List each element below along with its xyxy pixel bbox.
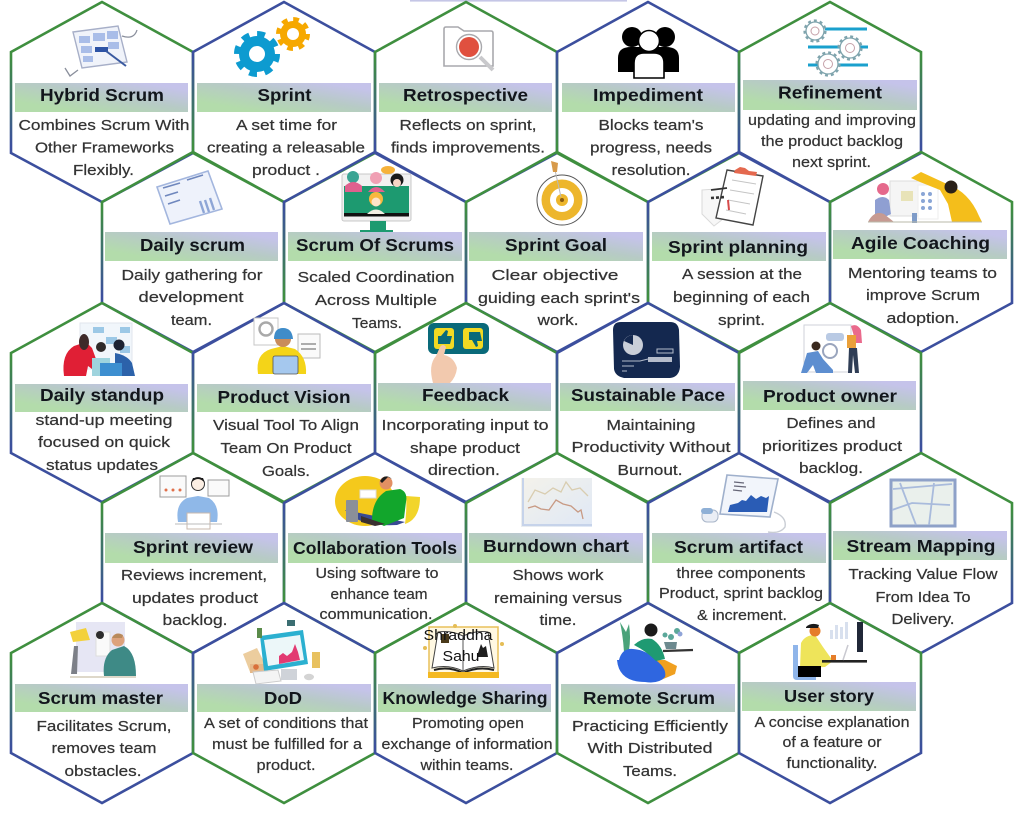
description: of a feature or [782,735,882,751]
heading: Sprint planning [668,237,808,257]
description: Flexibly. [73,163,134,179]
description: Combines Scrum With [18,118,190,134]
description: sprint. [718,313,765,329]
heading band [15,83,188,112]
heading: Refinement [778,83,882,103]
panel: Burndown chart [466,453,648,653]
icon: map frame [891,480,955,526]
description [121,568,267,629]
description: Clear objective [492,268,618,284]
description: Reviews increment, [121,568,267,584]
panel: Feedback [375,303,557,502]
icon: thumbs up and down [428,323,489,383]
icon: video call monitor [342,166,411,233]
description: within teams. [419,758,514,774]
description: & increment. [697,608,787,624]
panel: Scrum Of Scrums [284,152,466,352]
description: the product backlog [761,134,903,150]
description: Visual Tool To Align [213,418,359,434]
description: time. [540,613,576,629]
panel: Product Vision [193,303,375,502]
description: must be fulfilled for a [212,737,363,753]
hexagon [830,152,1012,352]
description: Team On Product [220,441,352,457]
description: Shows work [512,568,604,584]
description: removes team [52,741,156,757]
description [590,118,712,179]
heading band [15,684,188,712]
description: improve Scrum [866,288,980,304]
description: A session at the [682,267,802,283]
description [762,416,902,477]
description: adoption. [886,311,960,327]
description: updates product [132,591,258,607]
hexagon [375,603,557,803]
watermark: author name: Sahu [442,649,480,665]
description: A set of conditions that [204,716,368,732]
heading band [743,381,916,410]
hexagon [11,303,193,502]
description: product. [256,758,316,774]
hexagon [375,2,557,202]
heading band [743,80,917,110]
heading: Retrospective [403,85,528,105]
heading: Impediment [593,85,703,105]
hexagon [11,603,193,803]
hexagon [739,303,921,502]
heading: User story [784,686,874,706]
heading: Sprint Goal [505,235,607,255]
icon: person at computer [793,622,867,680]
hexagon [466,453,648,653]
description: Using software to [316,566,438,582]
hexagon [557,603,739,803]
panel: Remote Scrum [557,603,739,803]
icon: gears [237,20,308,74]
description: remaining versus [494,591,622,607]
description: product . [252,163,320,179]
icon: owner and teammate at board [801,325,862,373]
description [848,266,997,327]
description [18,118,190,179]
panel: Knowledge Sharing [375,603,557,803]
hexagon [193,2,375,202]
description: status updates [46,458,158,474]
description [36,719,172,780]
heading band [378,684,551,712]
hexagon [466,152,648,352]
panel: Daily standup [11,303,193,502]
heading: Stream Mapping [846,536,996,556]
hexagon [648,453,830,653]
heading band [15,384,188,412]
panel: Collaboration Tools [284,453,466,653]
panel: Agile Coaching [830,152,1012,352]
description [572,719,729,780]
icon: analytics tablet [701,475,785,532]
hexagon [102,152,284,352]
description: Promoting open [412,716,524,732]
panel: Product owner [739,303,921,502]
heading: Agile Coaching [851,233,990,253]
heading band [469,232,643,261]
heading band [288,533,462,563]
description: Teams. [623,764,677,780]
description [213,418,359,480]
description: resolution. [612,163,690,179]
icon: scrum master at desk [70,622,136,677]
description: Goals. [262,464,310,480]
description [478,268,640,329]
heading band [833,531,1007,560]
description: communication. [320,607,432,623]
icon: desktop with boxes [243,620,320,684]
description: obstacles. [64,764,142,780]
description: direction. [428,463,500,479]
description: finds improvements. [391,140,545,156]
description: Across Multiple [315,293,437,309]
description: backlog. [162,613,228,629]
description: Teams. [352,316,402,332]
description [382,418,548,479]
description [848,567,998,628]
heading: Product owner [763,386,897,406]
description: Reflects on sprint, [400,118,536,134]
description: exchange of information [382,737,552,753]
description: team. [171,313,212,329]
description: development [138,290,244,306]
heading band [197,83,371,112]
panel: Daily scrum [102,152,284,352]
description: next sprint. [792,155,871,171]
description [316,566,438,623]
description: Burnout. [618,463,682,479]
panel: Retrospective [375,2,557,202]
description: shape product [410,441,520,457]
description: focused on quick [38,435,171,451]
description: three components [676,566,806,582]
heading band [288,232,462,261]
heading band [105,232,278,261]
description: stand-up meeting [36,413,172,429]
icon: open book [423,624,504,678]
description: Other Frameworks [35,140,174,156]
icon: reviewer with charts [160,476,229,529]
hexagon [193,303,375,502]
heading: DoD [264,688,302,708]
heading: Hybrid Scrum [40,85,164,105]
description: Scaled Coordination [298,270,454,286]
icon: tablet board [65,26,137,76]
top strip [410,0,627,2]
description: Defines and [786,416,876,432]
description: Product, sprint backlog [659,586,823,602]
hexagon [557,2,739,202]
description: A set time for [236,118,337,134]
heading band [652,232,826,261]
heading band [378,383,551,411]
description: With Distributed [588,741,712,757]
heading: Daily scrum [140,235,245,255]
description [122,268,263,329]
icon: remote worker [617,622,693,682]
description: Facilitates Scrum, [36,719,172,735]
heading: Knowledge Sharing [382,688,548,708]
description: Blocks team's [598,118,704,134]
description: updating and improving [748,113,916,129]
description: Tracking Value Flow [848,567,998,583]
heading: Sprint review [133,537,253,557]
description [572,418,730,479]
heading: Scrum master [38,688,163,708]
description: Incorporating input to [382,418,548,434]
panel: Scrum master [11,603,193,803]
panel: Sprint Goal [466,152,648,352]
icon: clipboard [702,167,763,226]
description: functionality. [786,756,878,772]
description: Delivery. [892,612,954,628]
icon: person with laptop [254,318,320,374]
hexagon [739,603,921,803]
hexagon [11,2,193,202]
heading: Sprint [258,85,312,105]
icon: dark dashboard [613,322,680,378]
panel: Sustainable Pace [557,303,739,502]
description [382,716,552,774]
description: Productivity Without [572,440,730,456]
description: enhance team [330,587,428,603]
description: work. [536,313,578,329]
heading: Remote Scrum [583,688,715,708]
heading: Scrum Of Scrums [296,235,454,255]
heading: Product Vision [218,387,350,407]
heading band [560,383,735,411]
heading band [652,533,826,563]
heading band [197,684,371,712]
description: creating a releasable [207,140,365,156]
panel: Refinement [739,2,921,202]
icon: team silhouettes [618,27,679,78]
description: beginning of each [673,290,810,306]
panel: Scrum artifact [648,453,830,653]
description: A concise explanation [754,715,910,731]
description: prioritizes product [762,439,902,455]
panel: Hybrid Scrum [11,2,193,202]
description [391,118,545,156]
hexagon [739,2,921,202]
heading: Collaboration Tools [293,538,457,558]
description: From Idea To [876,590,970,606]
description [298,270,454,332]
heading: Daily standup [40,385,164,405]
icon: person working on laptop [335,476,420,526]
description: backlog. [799,461,863,477]
description: Maintaining [606,418,696,434]
heading band [562,83,735,112]
icon: coaching scene [868,172,982,223]
heading band [105,533,278,563]
icon: line chart [521,478,592,527]
hexagon [284,152,466,352]
hexagon [102,453,284,653]
panel: Sprint planning [648,152,830,352]
hexagon [375,303,557,502]
panel: Sprint [193,2,375,202]
heading band [197,384,371,412]
hexagon [648,152,830,352]
hexagon [830,453,1012,653]
watermark: author name: Shraddha [424,628,494,644]
hexagon [193,603,375,803]
watermark: author name [424,628,494,665]
description: progress, needs [590,140,712,156]
description: Mentoring teams to [848,266,997,282]
description [207,118,365,179]
description: Practicing Efficiently [572,719,729,735]
heading band [833,230,1007,259]
heading: Feedback [422,385,509,405]
description [748,113,916,171]
heading band [561,684,735,712]
hexagon [284,453,466,653]
heading band [742,682,916,711]
hexagon [557,303,739,502]
icon: folder with magnifier [444,27,493,70]
heading: Scrum artifact [674,537,803,557]
heading band [469,533,643,563]
heading: Burndown chart [483,536,629,556]
description: Daily gathering for [122,268,263,284]
icon: team at board [63,323,135,376]
panel: Sprint review [102,453,284,653]
description [204,716,368,774]
description [494,568,622,629]
panel: Stream Mapping [830,453,1012,653]
description [754,715,910,772]
description [673,267,810,329]
icon: sliders with gears [804,20,868,76]
icon: report tablet [157,171,222,224]
panel: User story [739,603,921,803]
icon: target [537,161,587,225]
description [659,566,823,624]
heading band [379,83,552,112]
description [36,413,172,474]
panel: DoD [193,603,375,803]
panel: Impediment [557,2,739,202]
description: guiding each sprint's [478,291,640,307]
heading: Sustainable Pace [571,385,725,405]
